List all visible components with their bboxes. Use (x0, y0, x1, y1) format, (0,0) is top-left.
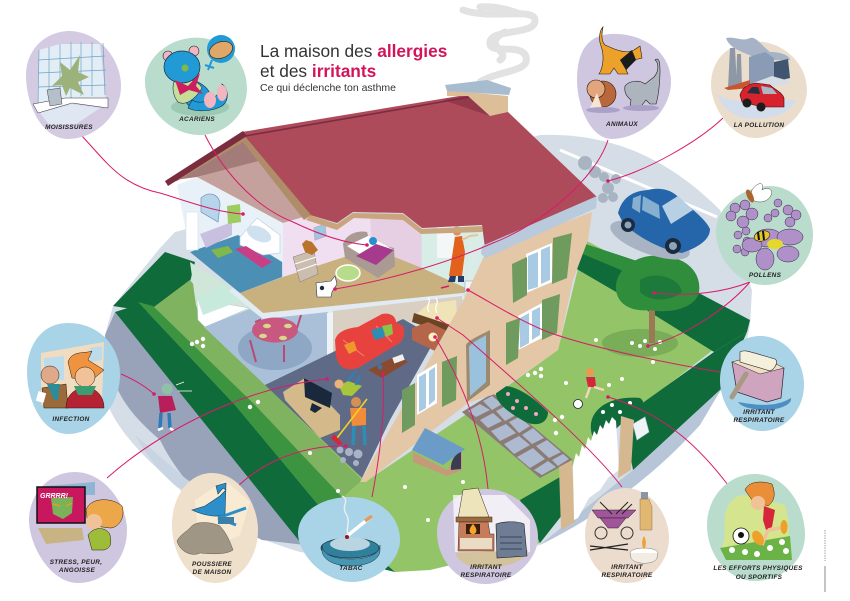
sink basin (40, 104, 100, 126)
flower bed (496, 386, 548, 424)
bee (753, 229, 771, 243)
living room floor (265, 319, 436, 478)
ashtray (321, 538, 379, 558)
brush (218, 508, 246, 525)
flower cluster (726, 199, 803, 270)
mailbox (633, 417, 649, 440)
credit line (824, 530, 826, 592)
exhaust smoke (578, 156, 621, 203)
cat (625, 59, 660, 110)
lower window (417, 363, 437, 415)
bubble: irritant peinture (720, 336, 804, 431)
lawn (150, 240, 745, 572)
left gate post (559, 460, 575, 530)
right hedge (623, 332, 747, 470)
garden gate and mailbox (559, 416, 649, 530)
chimney smoke (463, 7, 535, 82)
tree (602, 256, 699, 357)
boy with ball in garden (574, 368, 604, 408)
left pavement (135, 435, 215, 500)
bubble: stress peur angoisse: STRESS, PEUR, (50, 559, 102, 566)
paint pot (732, 362, 784, 402)
right pavement (540, 388, 722, 545)
title: La maison des allergies (260, 41, 447, 61)
tissue (36, 391, 46, 403)
flying child (334, 371, 362, 396)
back hedge (113, 252, 195, 312)
hair (745, 482, 774, 506)
bubble: efforts physiques (707, 474, 805, 581)
bubble: irritant peinture: IRRITANT (743, 409, 776, 416)
road marking (560, 150, 717, 217)
dog house (412, 428, 465, 476)
child (86, 500, 123, 528)
bubble: pollens (716, 184, 813, 285)
green monster (51, 497, 73, 519)
TV (37, 487, 85, 523)
bubble: irritant cheminée poêle: IRRITANT (470, 564, 503, 571)
attic (175, 138, 310, 223)
handle (732, 374, 746, 397)
bubble: acariens (145, 35, 247, 135)
bubble: acariens: ACARIENS (178, 116, 215, 123)
bubble: efforts physiques: OU SPORTIFS (736, 574, 783, 581)
smoke (342, 496, 348, 534)
left street (105, 312, 305, 545)
stone path (462, 393, 573, 478)
pink connector lines (81, 118, 750, 497)
red car (740, 83, 784, 107)
factory (728, 48, 742, 88)
blue car (606, 189, 710, 268)
fondue pot (592, 510, 636, 518)
kitchen (190, 262, 263, 327)
dustpan (192, 483, 226, 516)
candle (630, 548, 658, 558)
landing (422, 224, 487, 295)
bedroom (283, 213, 421, 277)
painter (441, 226, 480, 291)
bubble: infection: INFECTION (52, 416, 90, 423)
bubble: la pollution: LA POLLUTION (734, 122, 784, 129)
right window (518, 303, 542, 350)
upper window (526, 243, 552, 293)
chimney (445, 80, 511, 116)
bricks (458, 522, 494, 551)
white ground (453, 495, 530, 552)
hamster (590, 81, 616, 107)
pedestrian coughing (158, 382, 192, 431)
back right hedge (575, 243, 750, 352)
red sofa (335, 314, 404, 369)
roller (740, 351, 777, 371)
tiles (38, 44, 106, 108)
facade (360, 212, 592, 482)
dining set (238, 315, 312, 370)
mite (207, 35, 235, 63)
upper shutters (512, 233, 572, 303)
right shutters (506, 294, 560, 365)
title (260, 41, 447, 94)
spray (641, 492, 648, 499)
sink edge (33, 98, 108, 113)
title: et des irritants (260, 61, 376, 81)
hood (458, 488, 489, 519)
ball (733, 528, 749, 544)
coffee table (368, 354, 408, 378)
bubble: moisissures (26, 31, 121, 139)
dog (599, 27, 642, 74)
TV and console (283, 378, 340, 438)
flowers (729, 539, 789, 557)
bubble: irritant cheminée poêle: RESPIRATOIRE (461, 572, 512, 579)
blue teddy on bed (369, 237, 377, 245)
dog upstairs (316, 276, 337, 297)
upstairs floor (240, 248, 470, 313)
bubble: infection (27, 323, 120, 434)
road (717, 94, 796, 118)
man with scarf (41, 366, 59, 384)
bush behind gate (591, 398, 643, 445)
bubble: stress peur angoisse: ANGOISSE (58, 567, 96, 574)
bubble: irritant fondue bougie spray: RESPIRATOIRE (602, 572, 653, 579)
bathroom (177, 177, 283, 293)
teddy bear (171, 98, 229, 116)
wings and flying bee (750, 184, 772, 202)
house (165, 80, 597, 482)
bedroom furniture (293, 232, 395, 282)
bubble: irritant fondue bougie spray: IRRITANT (611, 564, 644, 571)
bubble: la pollution (711, 38, 807, 138)
lower shutters (402, 356, 457, 433)
tap (47, 88, 62, 106)
TV cabinet (38, 528, 84, 544)
bubble: moisissures: MOISISSURES (45, 124, 93, 131)
bubble: pollens: POLLENS (749, 272, 782, 279)
jersey and legs (763, 506, 775, 530)
fireplace (412, 297, 460, 352)
title: Ce qui déclenche ton asthme (260, 82, 396, 94)
road (102, 135, 752, 570)
bubble: stress peur angoisse: GRRRR! (40, 493, 69, 500)
bubble: efforts physiques: LES EFFORTS PHYSIQUES (713, 565, 803, 572)
bubble: animaux (577, 27, 671, 139)
bubble: tabac: TABAC (339, 565, 363, 572)
building (41, 342, 104, 405)
cigarette (347, 516, 372, 536)
dust pile (177, 522, 233, 554)
floor edge (229, 288, 465, 319)
bubble: poussière de maison: DE MAISON (193, 569, 232, 576)
bubble: animaux: ANIMAUX (605, 121, 638, 128)
hedge by gate (520, 473, 570, 543)
sweeping mother (331, 397, 367, 466)
stove (496, 522, 527, 558)
door (466, 330, 490, 402)
shaded left lawn (150, 280, 362, 500)
bubble: stress peur angoisse (29, 472, 127, 583)
left hedge (115, 304, 395, 572)
bubble: tabac (298, 496, 400, 582)
garden ground: road and lawn oval (102, 135, 752, 572)
dining floor (204, 309, 328, 385)
boy with scarf (68, 351, 104, 380)
bubble: poussière de maison (172, 473, 258, 583)
white pickets (573, 417, 619, 520)
bubble: poussière de maison: POUSSIERE (192, 561, 232, 568)
roof (165, 94, 597, 258)
bubble: irritant peinture: RESPIRATOIRE (734, 417, 785, 424)
bubble: irritant cheminée poêle (437, 488, 538, 584)
mould (52, 55, 89, 96)
right gate post (618, 416, 634, 478)
daisies (190, 337, 662, 522)
smoke (726, 38, 790, 60)
bubble: irritant fondue bougie spray (585, 488, 669, 583)
living room back wall (333, 296, 462, 354)
